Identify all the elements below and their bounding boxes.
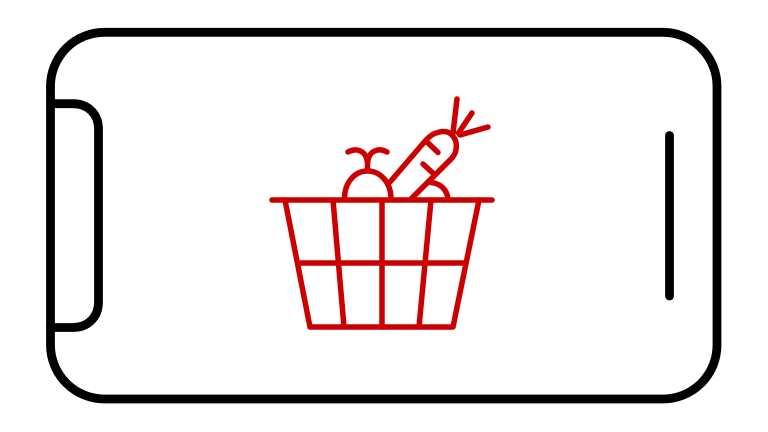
phone notch xyxy=(50,104,98,328)
carrot xyxy=(390,99,488,199)
small vegetable behind carrot xyxy=(431,182,448,199)
icon: smartphone xyxy=(50,32,717,399)
phone body outline xyxy=(50,32,717,399)
icon: vegetable basket xyxy=(272,99,492,327)
turnip xyxy=(344,150,391,199)
phone side button xyxy=(665,136,674,296)
basket xyxy=(272,200,492,327)
